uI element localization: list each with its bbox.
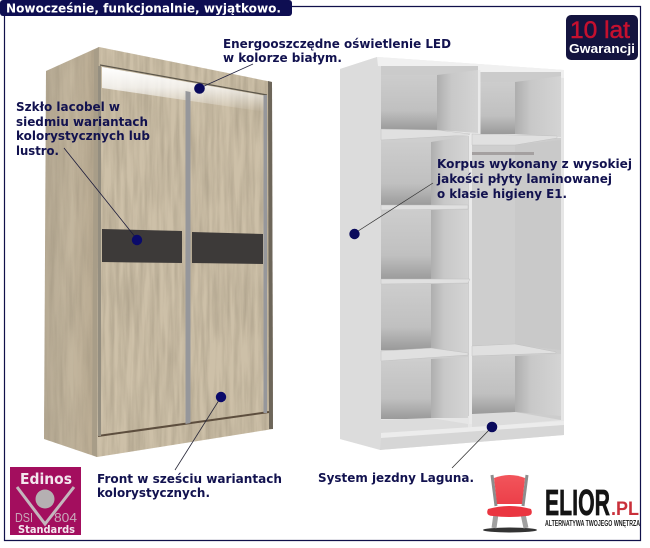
marker dot: front	[216, 392, 226, 402]
carcass	[340, 57, 564, 450]
title banner: Nowocześnie, funkcjonalnie, wyjątkowo.	[6, 0, 281, 16]
floor and plinth	[380, 412, 564, 450]
LED light strip	[102, 67, 266, 112]
top right compartment	[480, 72, 561, 137]
callout: LED lighting: Energooszczędne oświetlenie LED	[223, 37, 451, 51]
badge: 10 year warranty: 10 lat	[570, 17, 630, 44]
left column compartments	[381, 136, 470, 419]
callout: sliding system: System jezdny Laguna.	[318, 471, 474, 485]
logo: Edinos DSI 804 Standards	[10, 467, 81, 536]
wardrobe front panel	[97, 47, 273, 457]
shelves	[381, 129, 557, 361]
logo: Edinos DSI 804 Standards: 804	[54, 511, 77, 525]
marker dot: sliding system	[487, 422, 497, 432]
logo: Edinos DSI 804 Standards: Standards	[18, 523, 75, 536]
marker dot: LED	[194, 83, 205, 94]
callout: carcass: jakości płyty laminowanej	[436, 172, 612, 186]
callout: LED lighting: w kolorze białym.	[223, 51, 342, 65]
callout: lacobel glass: Szkło lacobel w	[16, 100, 120, 114]
badge: 10 year warranty: Gwarancji	[569, 41, 635, 56]
marker dot: carcass	[349, 229, 360, 239]
leader line: front	[175, 397, 221, 470]
logo: Elior.pl	[483, 475, 640, 532]
callout: front variants: kolorystycznych.	[97, 486, 210, 500]
logo: Edinos DSI 804 Standards: DSI	[15, 511, 33, 525]
door rails	[98, 66, 267, 436]
leader line: carcass	[355, 183, 433, 233]
leader line: sliding system	[452, 428, 491, 468]
callout: lacobel glass: lustro.	[16, 144, 59, 158]
wardrobe side panel	[44, 47, 99, 457]
top left compartment	[381, 66, 478, 133]
logo: Edinos DSI 804 Standards: Edinos	[20, 470, 72, 488]
callout: carcass: o klasie higieny E1.	[437, 187, 567, 201]
dividers	[478, 70, 480, 134]
callout: carcass: Korpus wykonany z wysokiej	[437, 157, 632, 171]
right column compartment	[472, 138, 561, 420]
icon: red chair	[483, 475, 537, 532]
wardrobe: closed oak front	[44, 47, 273, 457]
leader line: glass	[64, 148, 136, 238]
callout: lacobel glass: siedmiu wariantach	[16, 115, 148, 129]
hanging rail	[472, 152, 534, 155]
badge: 10 year warranty	[566, 15, 638, 60]
leader line: LED	[202, 64, 253, 87]
wardrobe: open white interior	[340, 57, 564, 450]
wordmark suffix: .PL	[611, 499, 639, 520]
lacobel glass strips	[102, 229, 263, 264]
callout: front variants: Front w sześciu wariantach	[97, 472, 282, 486]
callout: lacobel glass: kolorystycznych lub	[16, 129, 150, 143]
marker dot: glass	[132, 235, 142, 245]
